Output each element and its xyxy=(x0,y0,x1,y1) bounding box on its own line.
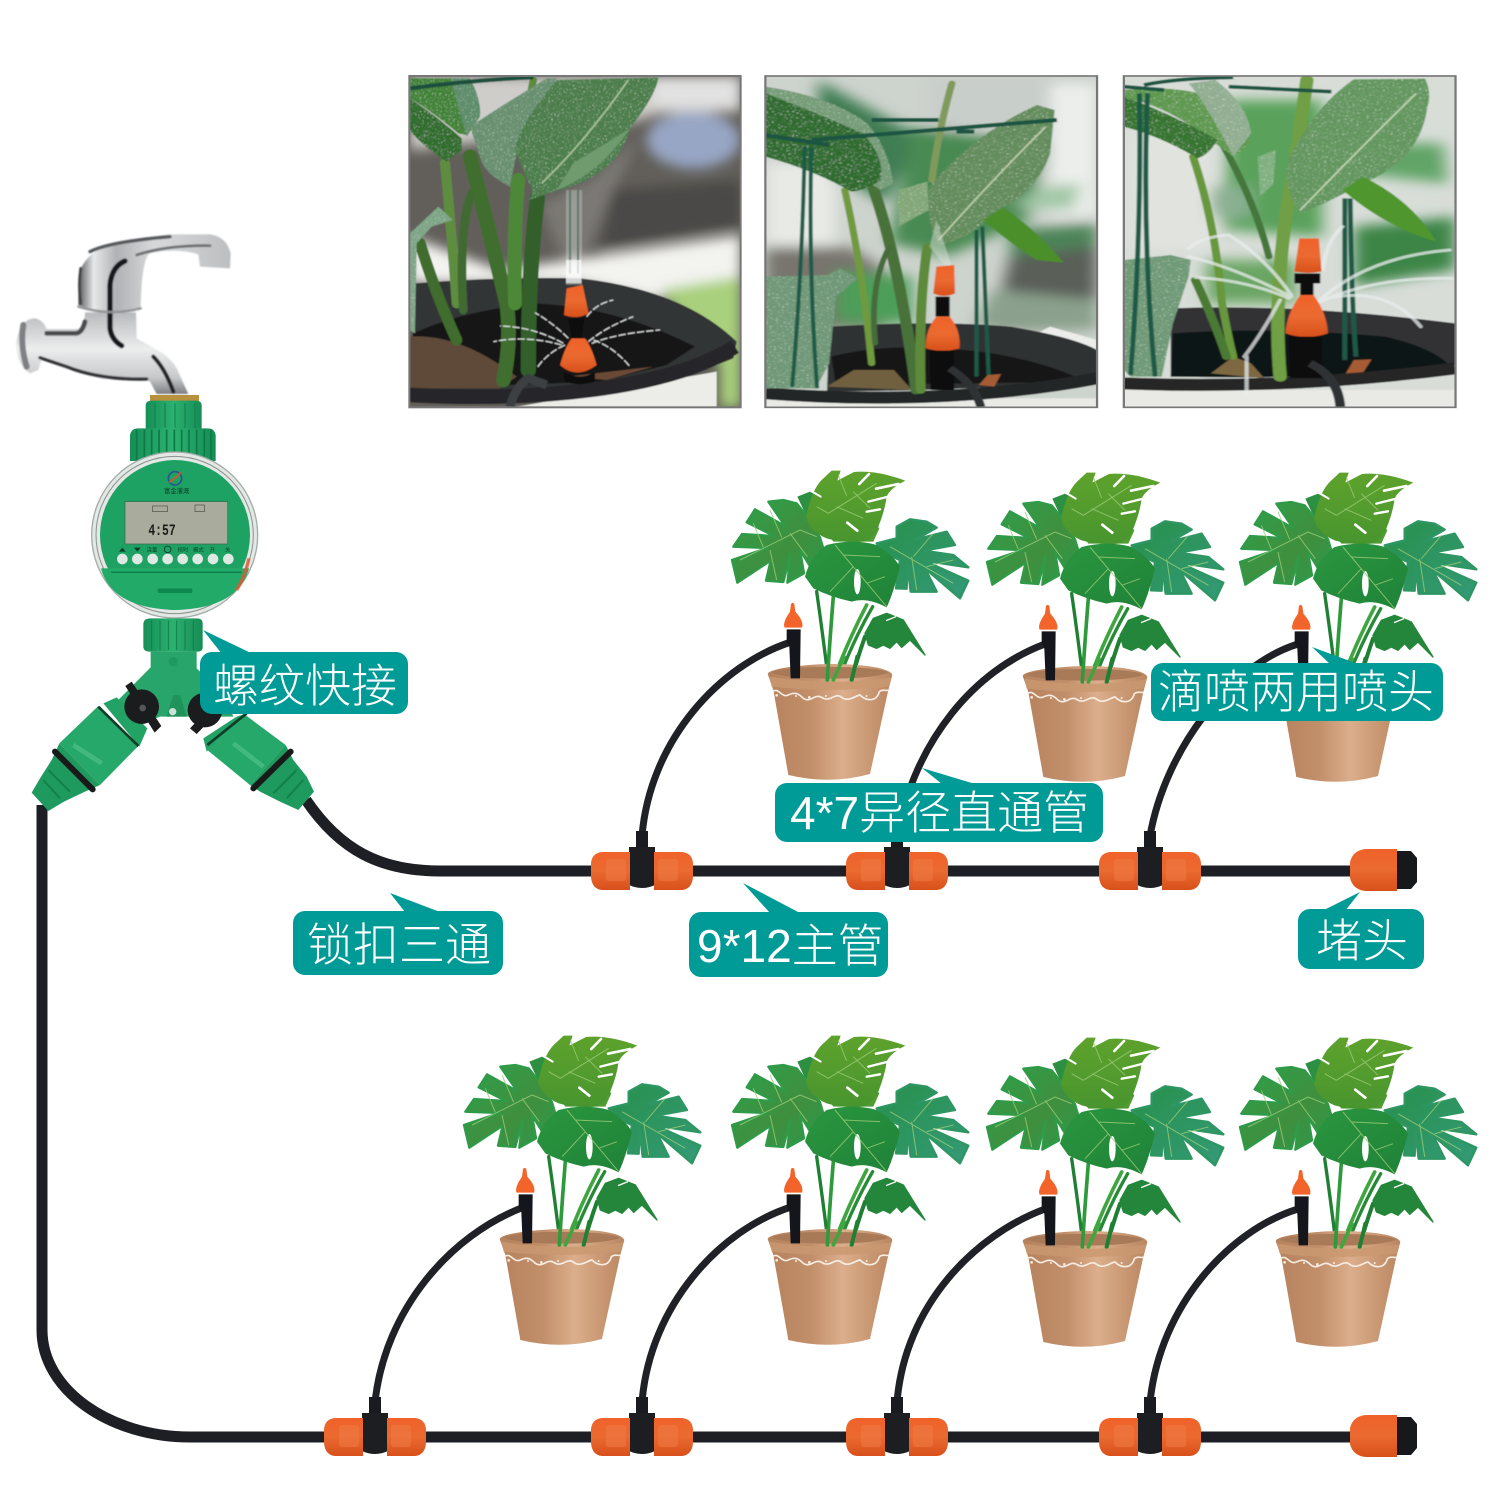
main pipe: lower run xyxy=(42,805,1355,1437)
button labels: 关 xyxy=(225,546,231,554)
callout: 螺纹快接 xyxy=(200,630,408,714)
right quick connector xyxy=(203,713,314,810)
right valve knob xyxy=(188,693,223,734)
callout: 4*7异径直通管: 4*7异径直通管 xyxy=(790,787,1089,839)
photo: spray nozzle in first pot xyxy=(409,76,741,407)
end cap: upper pipe xyxy=(1350,849,1417,891)
callout: 9*12主管: 9*12主管 xyxy=(697,920,884,972)
callout: 4*7异径直通管 xyxy=(775,768,1103,842)
button labels xyxy=(147,546,231,554)
brass thread xyxy=(150,395,199,401)
timer body: 富金灌溉 xyxy=(164,486,190,495)
plant: lower row 3 xyxy=(987,1038,1223,1347)
fitting: lower tee 2 xyxy=(591,1397,693,1456)
left quick connector xyxy=(32,697,147,811)
left valve knob xyxy=(124,682,161,733)
plant: upper row 1 xyxy=(732,471,968,780)
callout: 滴喷两用喷头 xyxy=(1151,647,1443,721)
timer head xyxy=(92,395,258,618)
buttons xyxy=(117,554,234,564)
button labels: 开 xyxy=(210,547,216,554)
fitting: upper tee 3 xyxy=(1099,831,1201,890)
timer body: 4:57 xyxy=(148,522,176,540)
callout: 锁扣三通 xyxy=(293,893,503,975)
water timer with Y valve assembly xyxy=(32,395,314,811)
plant: lower row 2 xyxy=(732,1036,968,1345)
branch hoses: upper row xyxy=(642,642,1298,836)
logo xyxy=(168,472,182,485)
photo: wide spray in third pot xyxy=(1124,76,1456,408)
icon: chrome faucet xyxy=(16,234,231,394)
Y valve xyxy=(32,618,314,811)
branch hoses: lower row xyxy=(375,1207,1298,1402)
Y body xyxy=(117,652,233,727)
LCD screen xyxy=(125,502,228,544)
inlet nut xyxy=(130,401,216,461)
timer body xyxy=(92,452,258,618)
callout: 堵头 xyxy=(1298,892,1424,969)
callout: 滴喷两用喷头: 滴喷两用喷头 xyxy=(1158,666,1434,718)
callout: 9*12主管 xyxy=(689,883,888,977)
fitting: lower tee 4 xyxy=(1099,1397,1201,1456)
plant: lower row 1 xyxy=(464,1036,700,1345)
threaded collar xyxy=(143,618,203,652)
fitting: lower tee 3 xyxy=(846,1397,948,1456)
main pipe: upper run xyxy=(306,800,1355,871)
fitting: upper tee 2 xyxy=(846,831,948,890)
callout: 螺纹快接: 螺纹快接 xyxy=(213,660,397,712)
plant: lower row 4 xyxy=(1240,1038,1476,1347)
button labels: 模式 xyxy=(193,546,204,554)
button labels: 校时 xyxy=(178,546,189,554)
end cap: lower pipe xyxy=(1350,1415,1417,1457)
callout: 锁扣三通: 锁扣三通 xyxy=(307,919,491,971)
photo: mist spray in second pot xyxy=(765,76,1097,408)
plant: upper row 3 xyxy=(1240,473,1476,782)
callout: 堵头: 堵头 xyxy=(1316,915,1408,967)
fitting: upper tee 1 xyxy=(591,831,693,890)
button labels: 浇量 xyxy=(147,546,158,554)
plant: upper row 2 xyxy=(987,473,1223,782)
fitting: lower tee 1 xyxy=(324,1397,426,1456)
